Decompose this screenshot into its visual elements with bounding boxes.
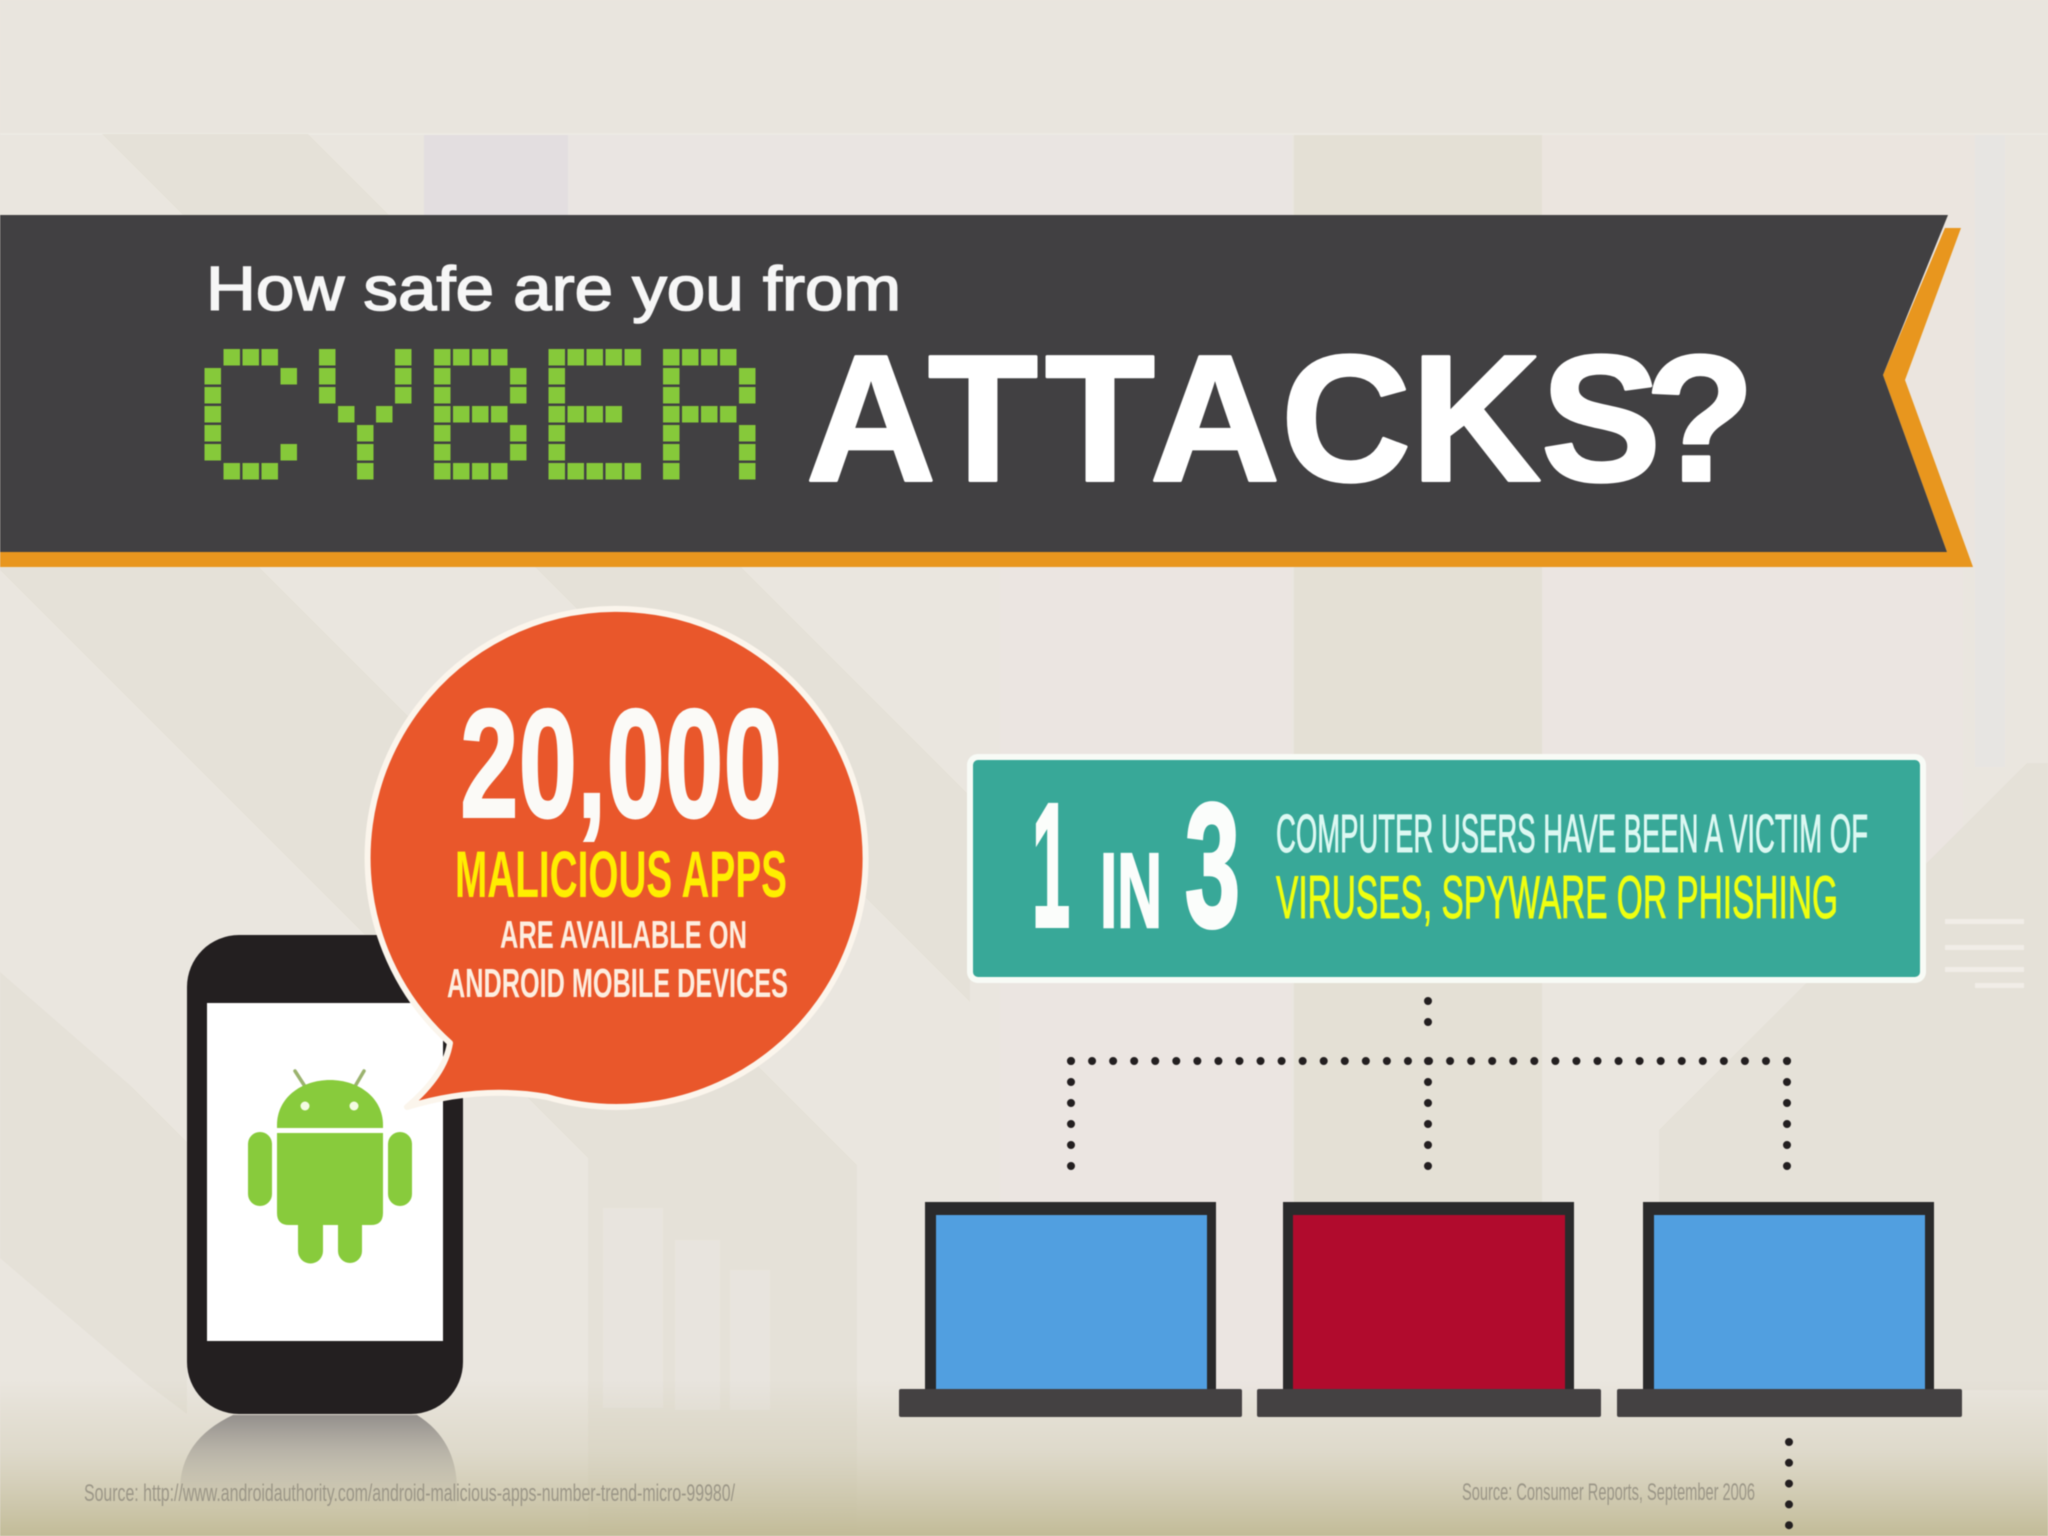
banner dark ribbon xyxy=(0,215,1948,552)
laptop: blue right xyxy=(1617,1202,1962,1417)
heading: how safe: How safe are you from xyxy=(206,255,901,324)
panel box xyxy=(970,757,1923,980)
banner orange ribbon xyxy=(0,228,1973,567)
stat: 1 in 3: 3 xyxy=(1185,768,1240,964)
laptop: blue left xyxy=(899,1202,1242,1417)
phone xyxy=(187,935,463,1414)
phone body xyxy=(187,935,463,1414)
stat: 1 in 3: 1 xyxy=(1032,768,1070,964)
stat: 20,000: 20,000 xyxy=(460,677,782,850)
laptop: red centre xyxy=(1257,1202,1601,1417)
dotted connector: continuation xyxy=(1785,1442,1793,1530)
background stripes xyxy=(424,135,2005,1390)
source: consumer reports: Source: Consumer Reports, September 2006 xyxy=(1462,1479,1755,1506)
panel: 1 in 3 xyxy=(970,757,1923,980)
phone reflection xyxy=(180,1415,457,1510)
label: malicious apps: MALICIOUS APPS xyxy=(455,837,787,911)
dotted connector xyxy=(1071,1001,1788,1167)
text: android mobile devices: ANDROID MOBILE DEVICES xyxy=(447,960,788,1006)
callout: speech bubble xyxy=(368,609,866,1107)
source: android: Source: http://www.androidauthority.com/android-malicious-apps-number-trend-micro-99980/ xyxy=(84,1480,735,1507)
stat: 1 in 3 xyxy=(1032,768,1240,964)
bubble shape xyxy=(368,609,866,1107)
icon: android robot xyxy=(248,1071,412,1263)
heading: attacks: ATTACKS? xyxy=(806,318,1755,520)
stat: 1 in 3: IN xyxy=(1100,832,1162,950)
background lines xyxy=(1945,919,2024,988)
title banner xyxy=(0,215,1973,567)
floor gradient xyxy=(0,1380,2048,1536)
phone screen xyxy=(207,1003,443,1341)
text: are available on: ARE AVAILABLE ON xyxy=(500,914,747,957)
